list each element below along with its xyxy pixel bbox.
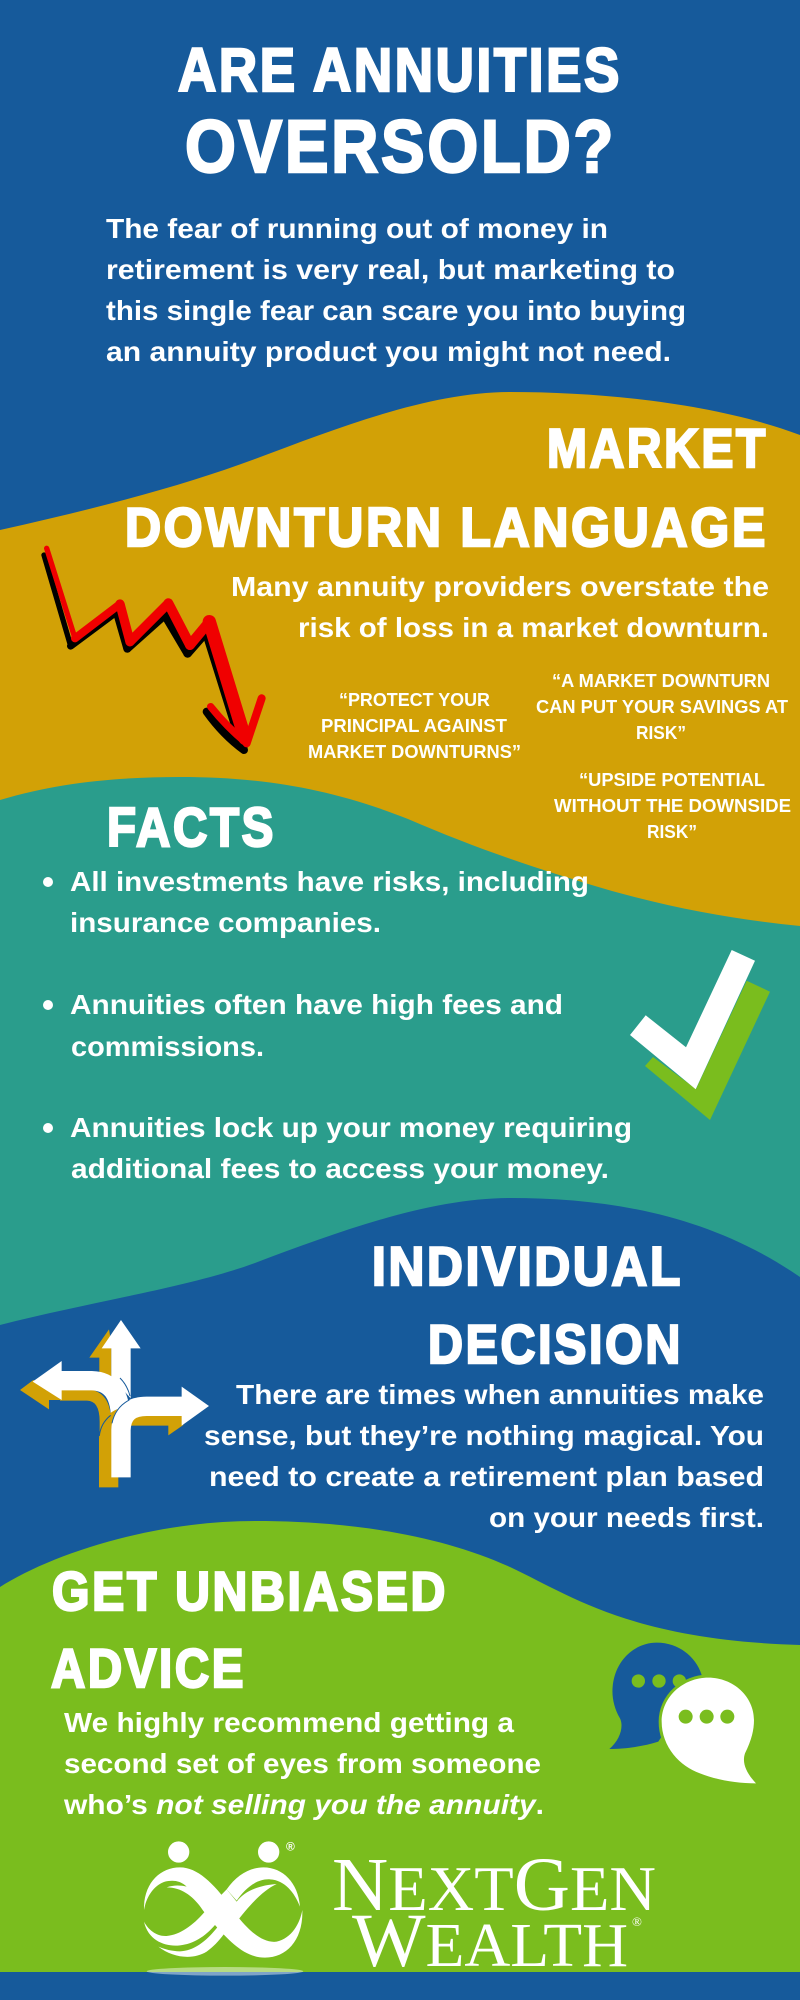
facts list: Annuities often have high fees and xyxy=(70,989,563,1020)
intro text: The fear of running out of money in xyxy=(106,213,608,244)
icon: check mark xyxy=(630,950,770,1120)
facts list: commissions. xyxy=(71,1031,264,1062)
intro text: this single fear can scare you into buying xyxy=(106,295,686,326)
heading: facts: FACTS xyxy=(107,796,276,858)
panel: market downturn language background xyxy=(0,392,800,1000)
title: ARE ANNUITIES xyxy=(178,36,622,104)
title xyxy=(178,36,622,188)
logo: NextGen Wealth wordmark: ® xyxy=(632,1914,642,1929)
facts list xyxy=(43,866,632,1184)
individual decision text block: need to create a retirement plan based xyxy=(209,1461,764,1492)
advice text block xyxy=(63,1707,544,1820)
market text block: risk of loss in a market downturn. xyxy=(298,612,769,643)
panel: individual decision background xyxy=(0,1198,800,1700)
logo: NextGen Wealth wordmark: WEALTH xyxy=(352,1899,628,1983)
logo: NextGen Wealth wordmark: NEXTGEN xyxy=(332,1843,656,1927)
advice text block: We highly recommend getting a xyxy=(64,1707,514,1738)
intro text xyxy=(106,213,686,367)
heading: individual decision: INDIVIDUAL xyxy=(372,1235,683,1297)
quote: upside potential: WITHOUT THE DOWNSIDE xyxy=(554,796,791,816)
quote: a market downturn xyxy=(536,671,788,743)
panel: facts background xyxy=(0,777,800,1400)
quote: protect your principal xyxy=(308,690,521,762)
heading: get unbiased advice: ADVICE xyxy=(51,1637,246,1699)
advice text block: who’s not selling you the annuity . xyxy=(63,1789,544,1820)
facts list: insurance companies. xyxy=(70,907,381,938)
facts list: Annuities lock up your money requiring xyxy=(70,1112,632,1143)
heading: market downturn language: MARKET xyxy=(547,417,768,479)
logo: NextGen Wealth wordmark xyxy=(332,1843,656,1983)
heading: get unbiased advice xyxy=(51,1560,448,1699)
facts list: additional fees to access your money. xyxy=(71,1153,609,1184)
quote: a market downturn: RISK” xyxy=(636,723,686,743)
market text block: Many annuity providers overstate the xyxy=(231,571,769,602)
quote: protect your principal: MARKET DOWNTURNS” xyxy=(308,742,521,762)
heading: market downturn language xyxy=(125,417,768,558)
heading: individual decision: DECISION xyxy=(428,1313,683,1375)
icon: speech bubbles xyxy=(609,1643,756,1783)
icon: falling red arrow chart xyxy=(44,548,262,750)
title: OVERSOLD? xyxy=(185,105,616,188)
quote: a market downturn: “A MARKET DOWNTURN xyxy=(552,671,770,691)
intro text: retirement is very real, but marketing to xyxy=(106,254,675,285)
quote: a market downturn: CAN PUT YOUR SAVINGS AT xyxy=(536,697,788,717)
quote: protect your principal: “PROTECT YOUR xyxy=(339,690,490,710)
icon: diverging arrows xyxy=(20,1320,209,1487)
heading: individual decision xyxy=(372,1235,683,1375)
intro text: an annuity product you might not need. xyxy=(106,336,671,367)
individual decision text block: There are times when annuities make xyxy=(236,1379,764,1410)
quote: upside potential: “UPSIDE POTENTIAL xyxy=(579,770,765,790)
advice text block: second set of eyes from someone xyxy=(64,1748,541,1779)
market text block xyxy=(231,571,769,643)
quote: upside potential xyxy=(554,770,791,842)
logo: NextGen Wealth emblem: ® xyxy=(286,1840,295,1854)
facts list: All investments have risks, including xyxy=(70,866,589,897)
individual decision text block: on your needs first. xyxy=(489,1502,764,1533)
logo: NextGen Wealth emblem xyxy=(144,1840,303,1976)
footer band xyxy=(0,1972,800,2000)
individual decision text block: sense, but they’re nothing magical. You xyxy=(204,1420,764,1451)
heading: get unbiased advice: GET UNBIASED xyxy=(52,1560,448,1622)
quote: upside potential: RISK” xyxy=(647,822,697,842)
panel: unbiased advice background xyxy=(0,1521,800,1972)
quote: protect your principal: PRINCIPAL AGAINST xyxy=(321,716,507,736)
individual decision text block xyxy=(204,1379,764,1533)
